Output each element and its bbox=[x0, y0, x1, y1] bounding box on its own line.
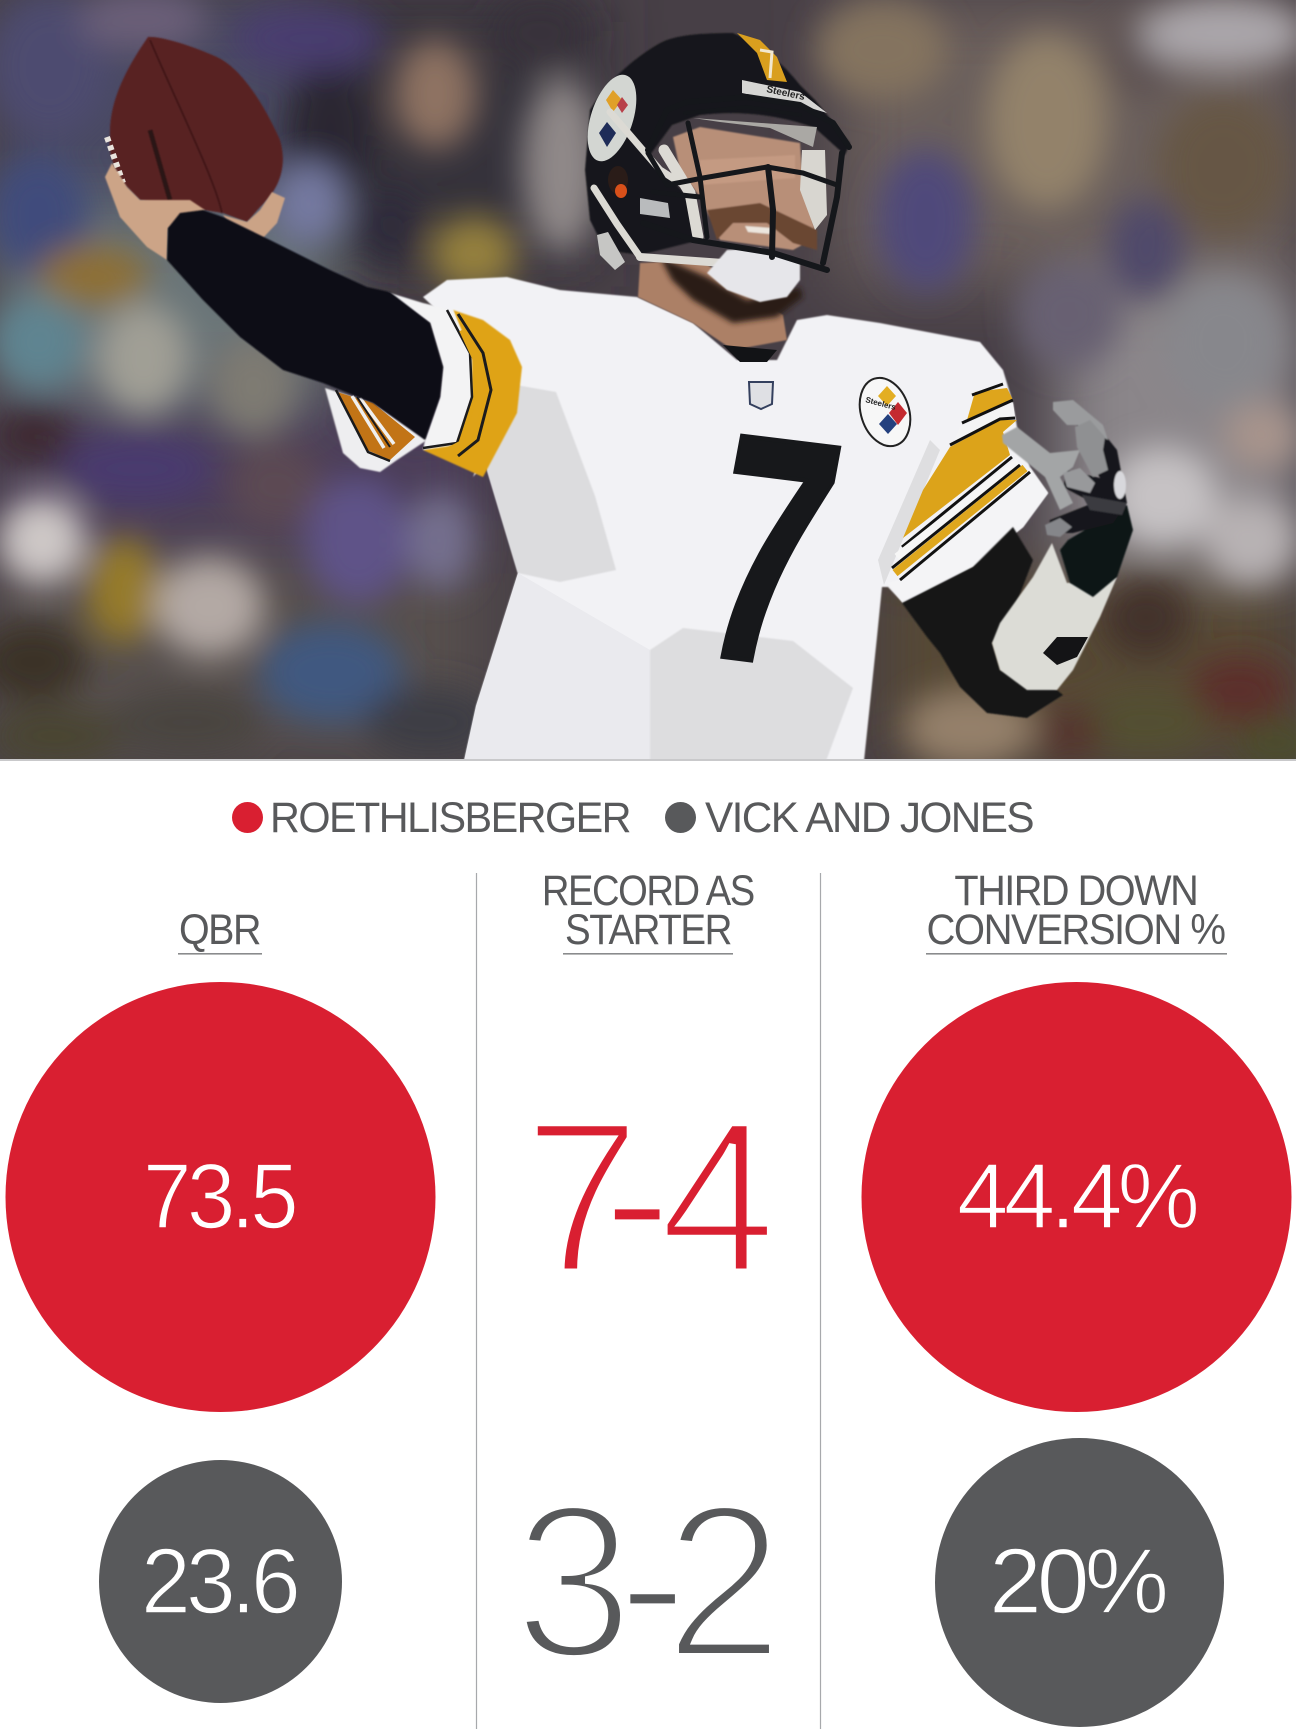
legend bbox=[232, 794, 1033, 842]
jersey number 7: 7 bbox=[679, 365, 862, 735]
heading: record as starter: STARTER bbox=[565, 906, 731, 954]
gray circle: 20%: 20% bbox=[989, 1529, 1166, 1633]
record 3-2: 3-2 bbox=[514, 1459, 784, 1703]
helmet straps bbox=[594, 112, 723, 263]
gray circle: 23.6: 23.6 bbox=[141, 1529, 297, 1633]
helmet nameplate bbox=[742, 80, 827, 113]
glove bbox=[1002, 400, 1133, 597]
column dividers bbox=[476, 873, 820, 1729]
white cuff, throwing arm bbox=[387, 292, 472, 450]
jersey team logo bbox=[851, 371, 919, 453]
column: record as starter bbox=[514, 867, 784, 1703]
helmet yellow stripe bbox=[737, 33, 787, 82]
helmet nameplate wordmark: Steelers bbox=[765, 84, 806, 103]
yellow sleeve band, throwing arm bbox=[423, 310, 522, 477]
column: QBR bbox=[6, 906, 436, 1703]
black compression sleeve, throwing arm bbox=[167, 210, 443, 440]
legend: gray dot bbox=[665, 802, 696, 833]
right sleeve yellow bands bbox=[892, 384, 1030, 580]
cuff stripes bbox=[423, 310, 491, 456]
heading: third down conversion: CONVERSION % bbox=[926, 906, 1225, 954]
helmet number bbox=[760, 50, 772, 78]
black forearm sleeve bbox=[902, 527, 1063, 718]
legend: red dot bbox=[232, 802, 263, 833]
right face pad bbox=[800, 150, 827, 230]
face bbox=[673, 127, 817, 250]
jersey mesh waist panel bbox=[650, 628, 853, 761]
logo wordmark: Steelers bbox=[864, 395, 897, 412]
blurred stadium crowd background bbox=[0, 0, 1296, 768]
helmet logo bbox=[578, 69, 646, 167]
right sleeve white lower bbox=[888, 468, 1048, 603]
football laces bbox=[107, 137, 123, 183]
record 7-4: 7-4 bbox=[524, 1076, 776, 1319]
throwing hand bbox=[105, 163, 285, 260]
heading: record as starter: RECORD AS bbox=[542, 867, 754, 915]
football bbox=[110, 37, 283, 222]
mesh panel by sleeve bbox=[878, 440, 940, 585]
ear pad bbox=[597, 232, 625, 270]
hem orange stripes bbox=[336, 390, 415, 461]
red circle: 44.4%: 44.4% bbox=[957, 1144, 1197, 1248]
helmet clip bbox=[640, 198, 670, 218]
underline bbox=[926, 953, 1227, 955]
red circle: 44.4% bbox=[862, 982, 1292, 1412]
chin guard bbox=[707, 248, 800, 302]
gray circle: 20% bbox=[935, 1438, 1224, 1727]
helmet shell bbox=[585, 33, 850, 255]
face mask bars bbox=[643, 97, 849, 270]
tape black patch bbox=[1043, 637, 1088, 665]
logo stars bbox=[878, 386, 907, 434]
underline bbox=[563, 953, 733, 955]
photo bottom fade line bbox=[0, 759, 1296, 761]
white wrist tape bbox=[992, 543, 1117, 690]
legend: Roethlisberger: ROETHLISBERGER bbox=[270, 794, 631, 842]
underline bbox=[178, 953, 262, 955]
neck bbox=[638, 260, 787, 350]
visor pad bbox=[693, 118, 817, 147]
NFL shield bbox=[749, 382, 773, 409]
chin beard bbox=[660, 257, 803, 323]
gray circle: 23.6 bbox=[99, 1460, 342, 1703]
legend: Vick and Jones: VICK AND JONES bbox=[705, 794, 1033, 842]
collar bbox=[723, 345, 777, 362]
red circle: 73.5 bbox=[6, 982, 436, 1412]
column: third down conversion bbox=[862, 867, 1292, 1727]
player figure bbox=[105, 33, 1133, 761]
helmet ear hole bbox=[608, 166, 628, 198]
red circle: 73.5: 73.5 bbox=[143, 1144, 295, 1248]
photo: quarterback throwing a football bbox=[0, 0, 1296, 761]
jersey lower shadow bbox=[464, 573, 650, 761]
heading: third down conversion: THIRD DOWN bbox=[954, 867, 1197, 915]
heading: QBR: QBR bbox=[179, 906, 260, 954]
jersey body bbox=[423, 277, 1048, 761]
jersey mesh side panel bbox=[485, 385, 616, 582]
jersey sleeve hem, left bbox=[325, 388, 427, 472]
